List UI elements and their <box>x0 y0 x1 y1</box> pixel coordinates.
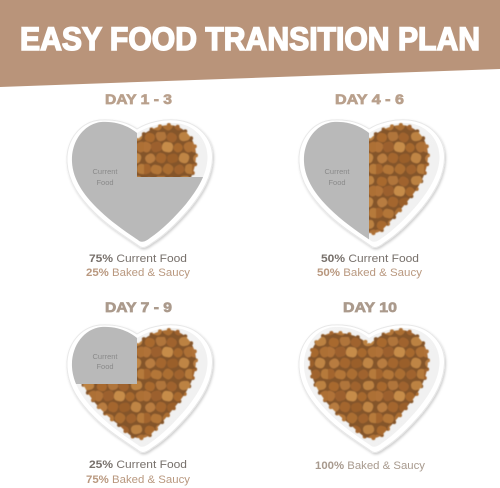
panel: day 4-6 <box>299 91 445 279</box>
label: current food: Current <box>92 167 118 176</box>
header banner <box>0 0 500 87</box>
title: EASY FOOD TRANSITION PLAN <box>20 21 480 57</box>
caption: baked and saucy share: 50% Baked & Saucy <box>317 267 423 279</box>
heart bowl with 50% current food <box>299 120 445 247</box>
caption: baked and saucy share: 100% Baked & Saucy <box>315 460 426 472</box>
caption: baked and saucy share: 25% Baked & Saucy <box>86 267 191 279</box>
heading: day 7-9: DAY 7 - 9 <box>105 299 172 315</box>
heading: day 10: DAY 10 <box>343 299 397 315</box>
panel: day 1-3 <box>67 91 213 279</box>
heart bowl with 100% baked and saucy <box>299 325 445 452</box>
caption: baked and saucy share: 75% Baked & Saucy <box>86 474 191 486</box>
label: current food: Current <box>324 167 350 176</box>
heading: day 4-6: DAY 4 - 6 <box>335 91 404 107</box>
caption: current food share: 25% Current Food <box>89 459 187 471</box>
heading: day 1-3: DAY 1 - 3 <box>105 91 172 107</box>
label: current food: Current <box>92 352 118 361</box>
heart bowl with 75% current food <box>67 120 213 247</box>
caption: current food share: 75% Current Food <box>89 253 187 265</box>
label: current food: Food <box>96 362 114 371</box>
caption: current food share: 50% Current Food <box>321 253 419 265</box>
label: current food: Food <box>96 178 114 187</box>
heart bowl with 25% current food <box>67 325 213 452</box>
label: current food: Food <box>328 178 346 187</box>
panel: day 10 <box>299 299 445 472</box>
panel: day 7-9 <box>67 299 213 486</box>
